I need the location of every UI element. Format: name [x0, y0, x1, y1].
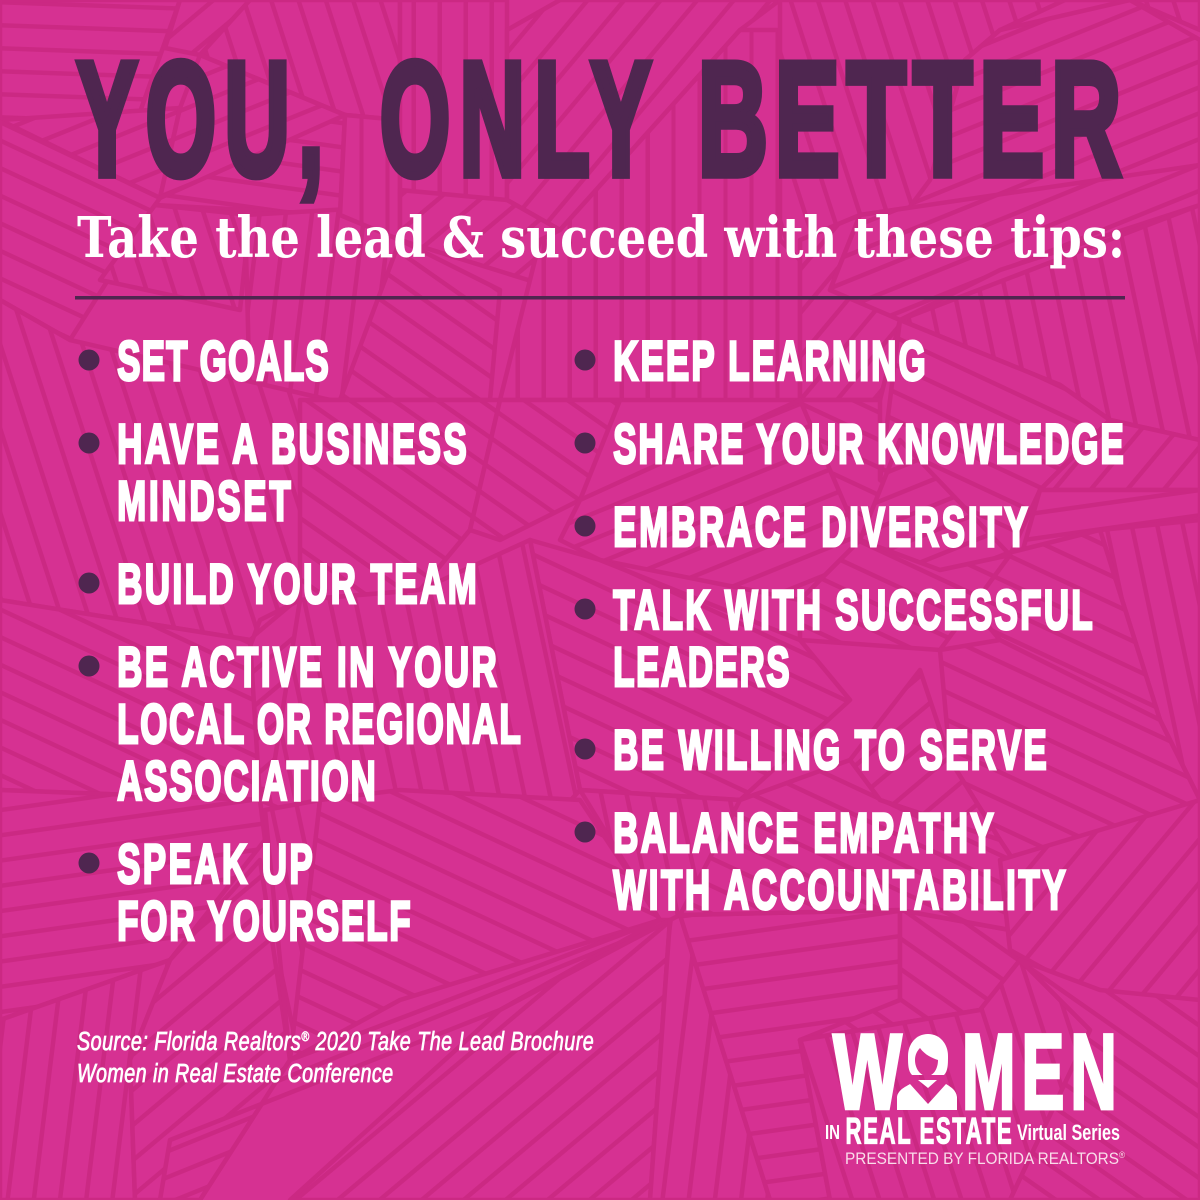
source note: Source: Florida Realtors [77, 1026, 301, 1056]
tip: balance empathy: BALANCE EMPATHY [613, 802, 994, 864]
tip: keep learning: KEEP LEARNING [613, 330, 926, 392]
tip: talk with leaders: TALK WITH SUCCESSFUL [613, 579, 1093, 641]
right tips column [574, 330, 1124, 921]
tip: business mindset: HAVE A BUSINESS [117, 413, 467, 475]
source note: Women in Real Estate Conference [77, 1058, 393, 1088]
logo: Women in Real Estate: IN [825, 1122, 840, 1144]
source note: 2020 Take The Lead Brochure [310, 1026, 594, 1056]
tip: business mindset: MINDSET [117, 470, 291, 532]
logo: Women in Real Estate: Virtual Series [1017, 1120, 1120, 1145]
tip: be active [78, 636, 521, 812]
logo: Women in Real Estate: W [833, 1013, 902, 1132]
tip: speak up [78, 833, 411, 952]
logo: Women in Real Estate [825, 1011, 1125, 1168]
title [77, 29, 1121, 210]
source note: ® [301, 1029, 310, 1044]
tip: be active: LOCAL OR REGIONAL [117, 693, 521, 755]
icon: woman in blazer [897, 1034, 957, 1110]
logo: Women in Real Estate: MEN [962, 1011, 1117, 1132]
title: ONLY [380, 29, 651, 209]
tip: talk with leaders: LEADERS [613, 636, 790, 698]
tip: business mindset [78, 413, 467, 532]
logo: Women in Real Estate: ® [1119, 1150, 1125, 1160]
logo: Women in Real Estate: PRESENTED BY FLORIDA REALTORS [845, 1149, 1148, 1168]
tip: build your team: BUILD YOUR TEAM [117, 553, 477, 615]
left tips column [78, 330, 521, 952]
tip: speak up: FOR YOURSELF [117, 890, 411, 952]
tip: talk with leaders [574, 579, 1093, 698]
tip: be active: BE ACTIVE IN YOUR [117, 636, 497, 698]
tip: speak up: SPEAK UP [117, 833, 313, 895]
title: YOU, [77, 29, 323, 209]
tip: embrace diversity: EMBRACE DIVERSITY [613, 496, 1028, 558]
tip: balance empathy [574, 802, 1066, 921]
tip: balance empathy: WITH ACCOUNTABILITY [613, 859, 1066, 921]
divider rule [75, 296, 1125, 300]
tip: set goals: SET GOALS [117, 330, 329, 392]
title: BETTER [698, 30, 1121, 210]
tip: be active: ASSOCIATION [117, 750, 376, 812]
source note [77, 1026, 594, 1088]
tip: share knowledge: SHARE YOUR KNOWLEDGE [613, 413, 1124, 475]
logo: Women in Real Estate: REAL ESTATE [846, 1111, 1012, 1152]
tip: willing to serve: BE WILLING TO SERVE [613, 719, 1047, 781]
